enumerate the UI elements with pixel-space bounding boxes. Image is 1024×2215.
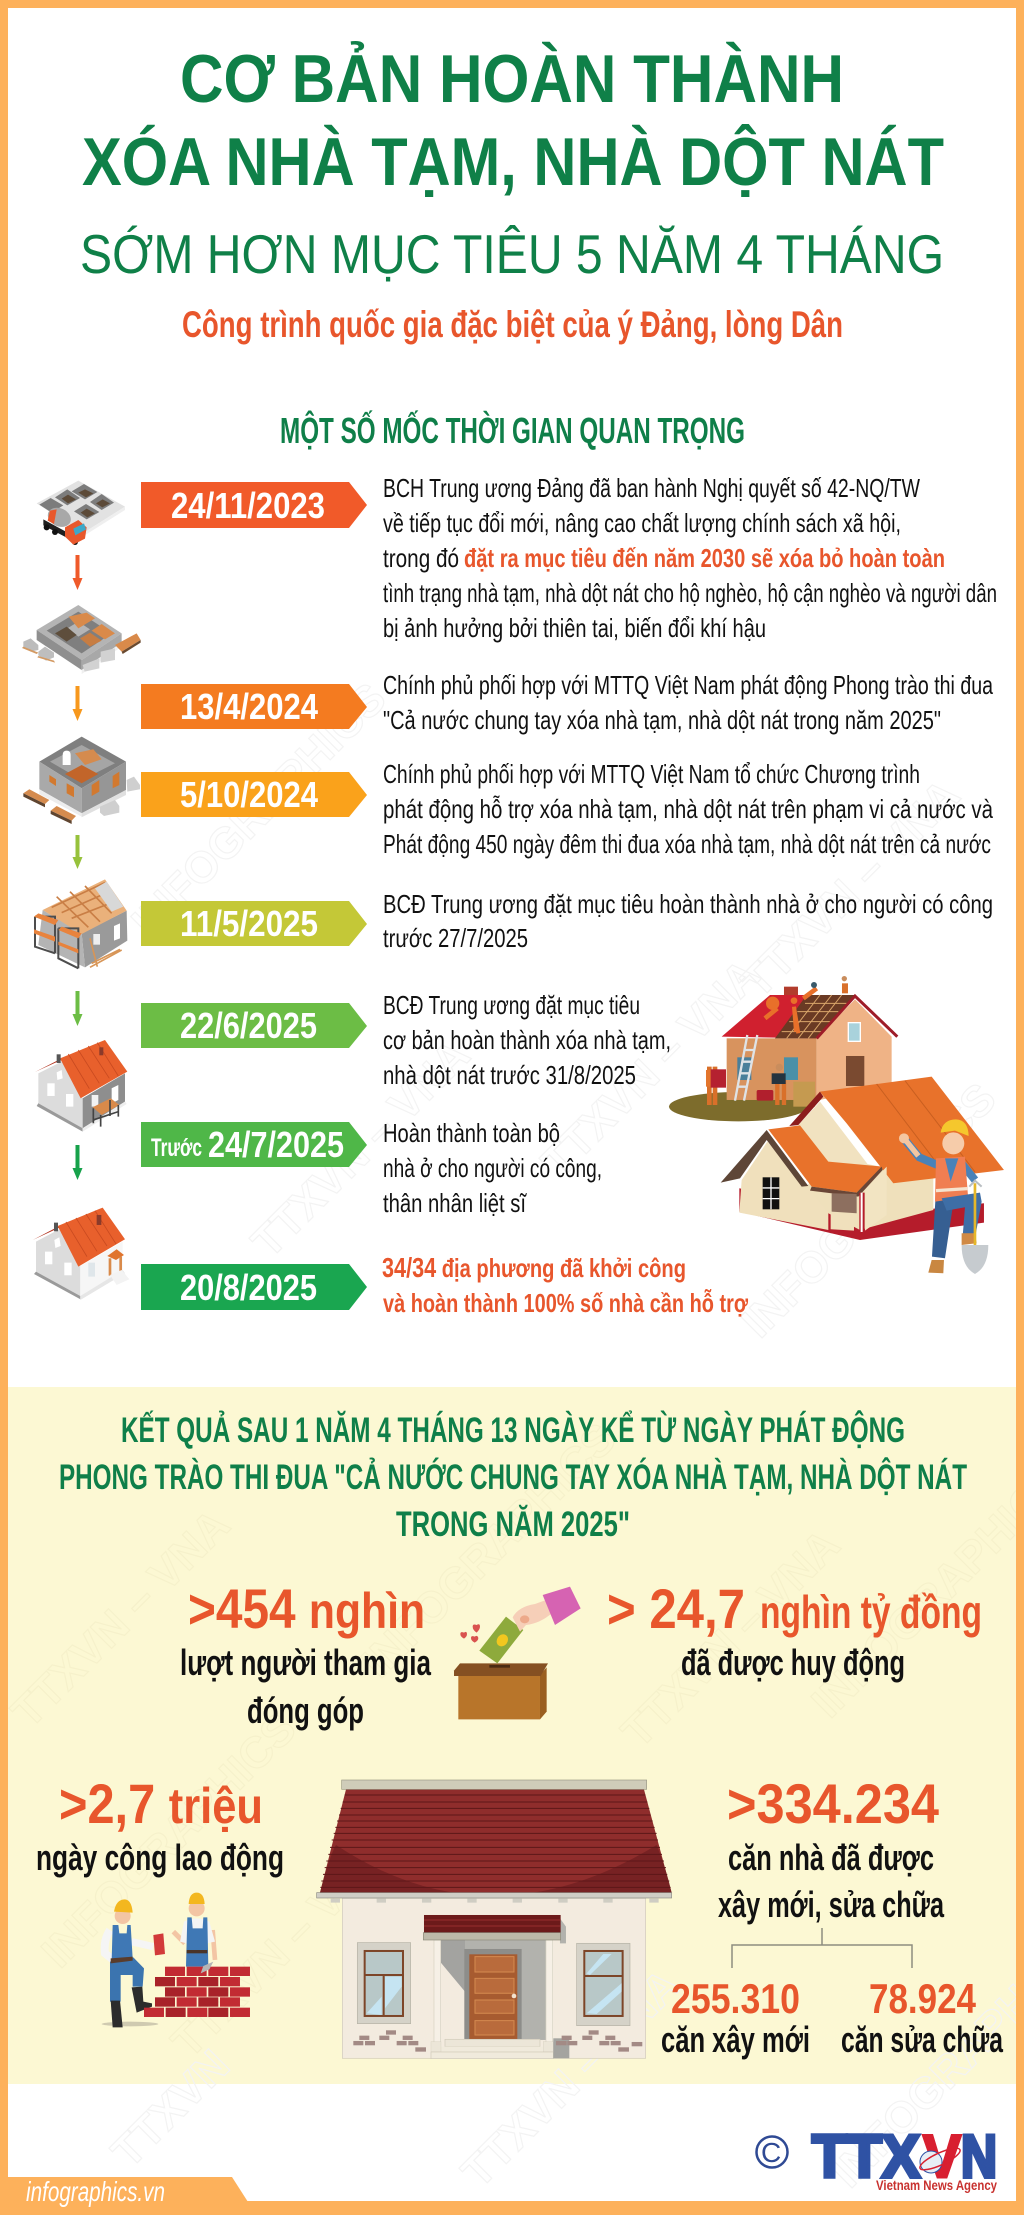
badge: 5/10/2024: 5/10/2024 [180,774,318,815]
arrow 5 [72,1145,82,1180]
heading: results: TRONG NĂM 2025" [396,1505,630,1544]
arrow 1 [72,555,82,590]
text block: people with merit [383,1118,602,1218]
text: TTXVN – VNA [242,1030,479,1267]
logo: TTXVN: TTX [812,2123,920,2190]
badge: 11/5/2025 [141,901,367,946]
badge: 24/11/2023: 24/11/2023 [171,485,325,526]
arrow 3 [72,835,82,869]
loose bricks [353,2030,642,2052]
icon: roof framing with scaffolding [34,879,127,968]
text block: people with merit: Hoàn thành toàn bộ [383,1118,560,1148]
arrow 2 [72,686,82,721]
icon: house under roof repair [706,976,897,1107]
badge: 22/6/2025: 22/6/2025 [180,1005,317,1046]
logo: TTXVN: V [923,2123,961,2190]
logo: TTXVN [812,2123,997,2193]
footer tab: infographics.vn: infographics.vn [26,2176,165,2207]
text block: resolution 42: trong đó [383,543,459,573]
text block: 27/7/2025 target: trước 27/7/2025 [383,923,528,953]
stat: 334234 houses: >334.234 [727,1772,939,1835]
text block: resolution 42: bị ảnh hưởng bởi thiên tai, biến đổi khí hậu [383,613,766,643]
text: TTXVN – VNA [452,1960,689,2197]
text: TTXVN – VNA [532,950,769,1187]
logo: TTXVN: N [961,2123,997,2190]
icon: donation box [454,1587,581,1719]
second worker [173,1893,215,1967]
stat: 454 thousand participants: đóng góp [247,1690,364,1731]
stat: new houses: 255.310 [671,1975,800,2022]
text: INFOGRAPHICS [32,1704,306,1977]
text: TTXVN – VNA [612,1520,849,1757]
brick wall [144,1967,250,2017]
window right [577,1943,630,2026]
badge: 13/4/2024: 13/4/2024 [180,686,318,727]
text: TTXVN – VNA [162,1830,399,2067]
stat: 2.7 million workdays: >2,7 triệu [59,1772,263,1835]
icon: foundation walls [22,605,141,674]
badge: 20/8/2025: 20/8/2025 [180,1267,317,1308]
stat: 24.7 trillion dong [607,1577,982,1683]
stat: 24.7 trillion dong: đã được huy động [681,1642,905,1683]
copyright symbol: C [761,2137,781,2168]
stat: 454 thousand participants: lượt người tham gia [180,1642,432,1683]
first worker [105,1899,165,2027]
text: INFOGRAPHICS [352,1414,626,1687]
stat: new houses: căn xây mới [661,2019,810,2060]
icon: house with small scaffold [35,1040,127,1132]
stat: 334234 houses [718,1772,945,1925]
section heading: milestones: MỘT SỐ MỐC THỜI GIAN QUAN TRỌNG [280,409,745,451]
icon: foundation slab with mixer truck [37,481,125,545]
porch [423,1915,569,2059]
text: INFOGRAPHICS [732,1074,1006,1347]
icon: walls raised [23,737,140,824]
text: INFOGRAPHICS [122,674,396,947]
text block: 31/8/2025 target: BCĐ Trung ương đặt mục tiêu [383,990,640,1020]
icon: finished orange-roof house [721,1077,1004,1274]
illustration: completed house [317,1780,672,2059]
title: CƠ BẢN HOÀN THÀNH [180,40,844,117]
stat: repaired houses [841,1975,1004,2060]
illustration: houses being repaired and worker [669,976,1004,1274]
stat: 24.7 trillion dong: > 24,7 [607,1577,745,1640]
text block: people with merit: nhà ở cho người có công, [383,1153,602,1183]
text: TTXVN [102,2040,239,2177]
title [82,40,944,200]
badge: 5/10/2024 [141,772,367,817]
badge: 22/6/2025 [141,1003,367,1048]
text block: 27/7/2025 target [383,889,993,953]
logo: TTXVN: Vietnam News Agency [876,2177,997,2193]
text: TTXVN – VNA [732,770,969,1007]
bracket connector [732,1928,912,1968]
ground [669,1092,808,1121]
text block: 31/8/2025 target: cơ bản hoàn thành xóa nhà tạm, [383,1025,671,1055]
icon: bricklayers [102,1893,250,2027]
text block: resolution 42 [383,473,997,643]
stat: 454 thousand participants [180,1577,432,1731]
badge: 11/5/2025: 11/5/2025 [180,903,318,944]
badge: Trước 24/7/2025 [141,1122,367,1167]
stat: new houses [661,1975,810,2060]
text: TTXVN – VNA [2,1500,239,1737]
panel: timeline [22,473,997,1318]
text block: emulation movement [383,670,993,735]
stat: 2.7 million workdays [36,1772,284,1878]
stat: 334234 houses: căn nhà đã được [728,1837,934,1878]
arrow 4 [72,991,82,1026]
stat: 2.7 million workdays: ngày công lao động [36,1837,284,1878]
stat: repaired houses: 78.924 [869,1975,977,2022]
icon: finished house [33,1208,129,1300]
badge: Trước 24/7/2025: 24/7/2025 [208,1124,344,1165]
window left [357,1943,411,2024]
copyright symbol [756,2136,788,2168]
text block: 34/34 localities: và hoàn thành 100% số nhà cần hỗ trợ [383,1288,748,1318]
stat: 454 thousand participants: >454 nghìn [188,1577,425,1640]
icon: construction worker [899,1119,988,1274]
text block: 34/34 localities [382,1252,748,1318]
text block: 34/34 localities: 34/34 địa phương đã khởi công [382,1252,686,1283]
badge: 13/4/2024 [141,684,367,729]
text block: 31/8/2025 target [383,990,671,1090]
heading: results [59,1410,967,1544]
badge: Trước 24/7/2025: Trước [151,1134,202,1162]
text block: 31/8/2025 target: nhà dột nát trước 31/8/2025 [383,1060,636,1090]
text block: programme launch [383,759,993,859]
panel: results background [8,1387,1016,2084]
text block: people with merit: thân nhân liệt sĩ [383,1188,527,1218]
badge: 20/8/2025 [141,1264,367,1310]
